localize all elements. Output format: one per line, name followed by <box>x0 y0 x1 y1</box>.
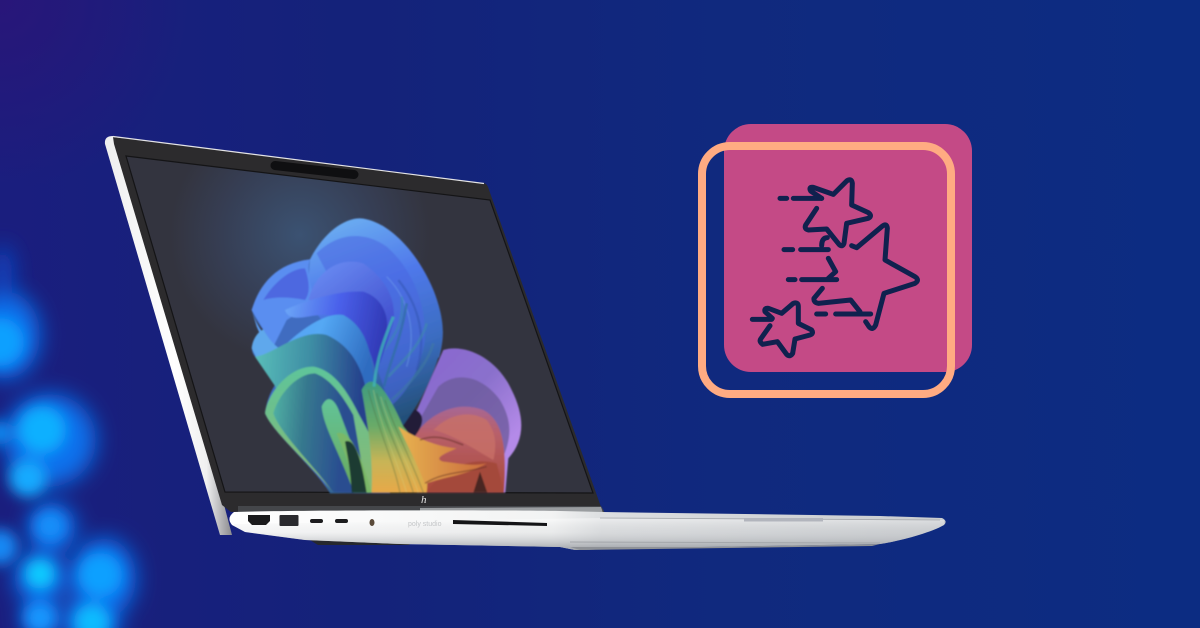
port: USB-A <box>280 515 298 526</box>
teal strands <box>374 317 393 387</box>
stem of folds <box>362 382 427 493</box>
camera notch <box>275 166 354 174</box>
blurred cyan bokeh lights <box>0 245 136 628</box>
port: USB-C 2 <box>335 519 348 523</box>
port: USB-C 1 <box>310 519 323 523</box>
purple petal <box>407 348 521 493</box>
rubber foot <box>305 537 410 545</box>
star large <box>814 225 917 328</box>
laptop lid: bezel <box>113 137 601 512</box>
HP logo: h <box>421 494 427 506</box>
card slot <box>453 520 547 526</box>
orange folds <box>398 427 487 484</box>
port: audio jack <box>370 519 374 526</box>
base shading <box>234 518 944 550</box>
lighter lid detent <box>744 518 823 522</box>
green shell petal <box>265 367 402 493</box>
lid top highlight <box>113 136 484 184</box>
teal petal <box>255 334 390 493</box>
star top <box>805 180 870 246</box>
icon: pink square <box>724 124 972 372</box>
hinge strip <box>238 506 605 513</box>
laptop lid: silver side edge <box>105 136 232 535</box>
star small <box>760 303 813 356</box>
blue back petal <box>307 218 442 430</box>
laptop <box>105 136 946 550</box>
laptop screen <box>126 156 593 506</box>
icon: shooting stars <box>752 180 917 356</box>
left blue lobe <box>252 259 314 347</box>
port: HDMI <box>248 515 270 525</box>
front foot <box>570 544 880 550</box>
icon: peach outline <box>702 146 951 394</box>
light blue band <box>252 310 374 390</box>
backing silhouette <box>252 218 443 493</box>
green inner fold <box>322 399 370 493</box>
icon block <box>702 124 972 394</box>
laptop base <box>229 510 946 550</box>
speed lines <box>752 198 871 319</box>
centre violet fold <box>308 262 394 363</box>
base top lines <box>600 518 940 520</box>
brand label: poly studio <box>408 521 442 528</box>
blue fold <box>285 291 387 377</box>
wallpaper bloom <box>252 218 521 493</box>
